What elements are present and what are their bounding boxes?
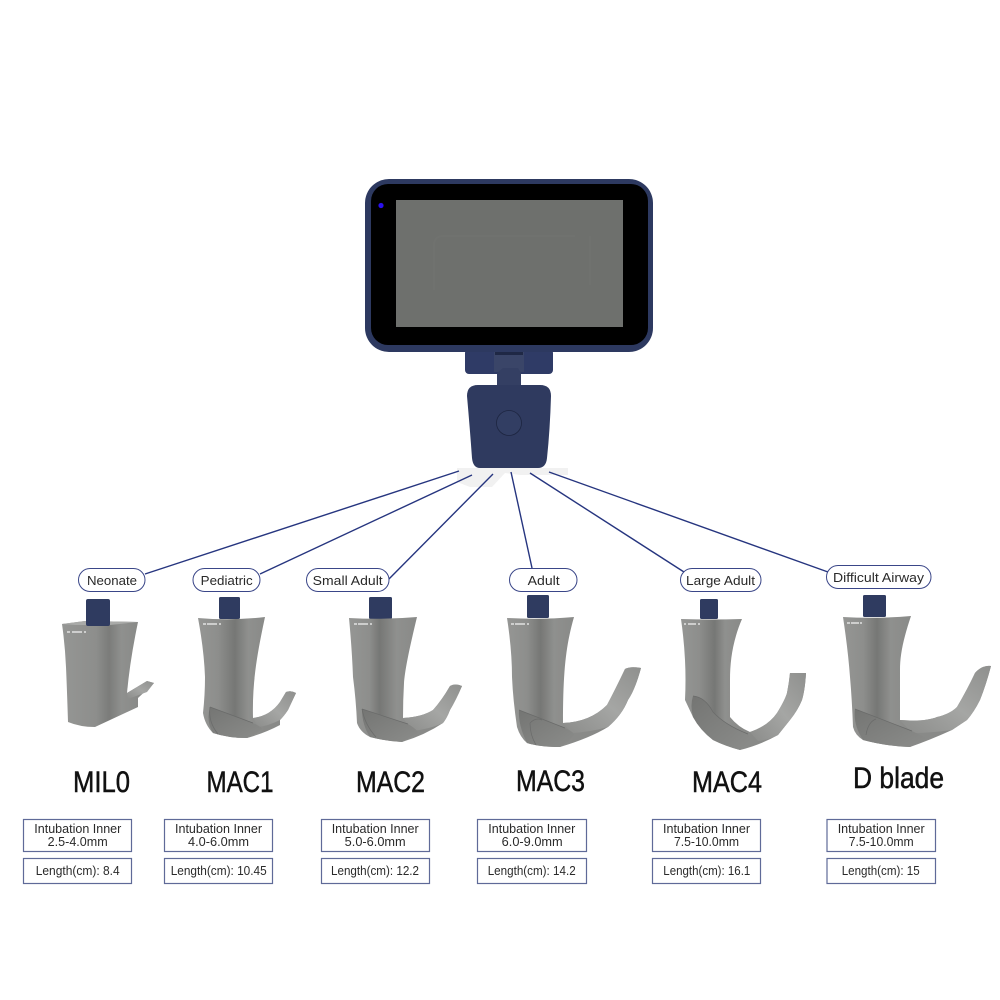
blade body (349, 617, 462, 742)
monitor bezel (371, 184, 648, 345)
intubation box: Intubation Inner (488, 822, 575, 836)
intubation box (164, 820, 272, 852)
label pill: Difficult Airway (826, 566, 931, 588)
label pill: Large Adult (680, 568, 761, 592)
blade handle connector (863, 595, 886, 617)
power LED (378, 203, 384, 208)
blade group: MIL0 neonate (62, 568, 154, 799)
name: MAC1: MAC1 (206, 766, 274, 799)
length box: Length(cm): 15 (842, 864, 920, 878)
intubation box: 4.0-6.0mm (188, 835, 249, 849)
blade handle connector (369, 597, 392, 619)
label pill: Large Adult: Large Adult (686, 574, 756, 588)
blade plate (692, 696, 752, 750)
blade logo (684, 623, 700, 625)
blade logo (511, 623, 529, 625)
hinge (465, 349, 553, 387)
label pill: Neonate (78, 568, 145, 592)
length box: Length(cm): 14.2 (488, 864, 576, 878)
blade body (198, 617, 296, 738)
blade tongue (563, 667, 641, 733)
name: MAC4: MAC4 (692, 766, 762, 799)
intubation box: Intubation Inner (663, 822, 750, 836)
intubation box: Intubation Inner (838, 822, 925, 836)
label pill: Pediatric (193, 568, 260, 592)
label pill: Adult (510, 568, 577, 592)
intubation box: 7.5-10.0mm (674, 835, 739, 849)
label pill: Difficult Airway: Difficult Airway (833, 571, 925, 585)
handle button (496, 410, 522, 436)
intubation box (652, 820, 760, 852)
intubation box: Intubation Inner (34, 822, 121, 836)
blade group: MAC3 adult (507, 568, 641, 798)
intubation box: 6.0-9.0mm (502, 835, 563, 849)
plate edge (210, 707, 253, 734)
blade group: MAC2 small adult (306, 568, 462, 799)
blade handle connector (86, 599, 110, 626)
intubation box (322, 820, 430, 852)
connector lines (145, 471, 828, 584)
blade handle connector (527, 595, 549, 618)
spec boxes: MIL0 (24, 820, 132, 884)
blade logo (203, 623, 221, 625)
length box: Length(cm): 8.4 (36, 864, 120, 878)
spec boxes: MAC1 (164, 820, 272, 884)
name: D blade: D blade (853, 762, 944, 795)
intubation box (24, 820, 132, 852)
label pill: Pediatric: Pediatric (201, 574, 253, 588)
label pill: Adult: Adult (528, 574, 560, 588)
blade logo (847, 622, 862, 624)
intubation box (827, 820, 936, 852)
intubation box: Intubation Inner (332, 822, 419, 836)
intubation box (478, 820, 586, 852)
spec boxes: MAC2 (322, 820, 430, 884)
blade logo (67, 631, 86, 633)
name: MIL0: MIL0 (73, 766, 130, 799)
blade group: D blade difficult airway (826, 566, 991, 795)
name: MAC2: MAC2 (356, 766, 425, 799)
blade top face (62, 621, 138, 625)
intubation box: 5.0-6.0mm (345, 835, 406, 849)
device: video laryngoscope monitor (365, 179, 653, 468)
blade tongue (750, 673, 806, 741)
blade handle connector (700, 599, 718, 619)
plate edge (362, 709, 408, 737)
blade tongue (253, 691, 296, 727)
label pill: Small Adult: Small Adult (313, 574, 383, 588)
intubation box: 7.5-10.0mm (849, 835, 914, 849)
intubation box: 2.5-4.0mm (48, 835, 108, 849)
blade body (507, 617, 641, 747)
blade logo (354, 623, 372, 625)
blade tip (127, 681, 154, 699)
length box: Length(cm): 12.2 (331, 864, 419, 878)
length box: Length(cm): 16.1 (663, 864, 750, 878)
blade tongue (900, 666, 991, 733)
spec boxes: D blade (827, 820, 936, 884)
blade plate (855, 709, 926, 747)
blade plate (362, 709, 418, 742)
blade plate (209, 707, 262, 738)
plate edge (855, 709, 912, 735)
blade body (62, 621, 154, 727)
spec boxes: MAC3 (478, 820, 586, 884)
connector base strip (457, 468, 568, 487)
blade body (843, 616, 991, 747)
plate edge (519, 710, 565, 745)
blade group: MAC4 large adult (680, 568, 806, 799)
blade tongue (403, 684, 462, 731)
blade plate (519, 710, 574, 747)
faint screen reflection (434, 236, 590, 290)
spec boxes: MAC4 (652, 820, 760, 884)
blade group: MAC1 pediatric (193, 568, 296, 799)
label pill: Neonate: Neonate (87, 574, 137, 588)
blade handle connector (219, 597, 240, 619)
label pill: Small Adult (306, 568, 389, 592)
length box: Length(cm): 10.45 (171, 864, 267, 878)
monitor screen (396, 200, 623, 327)
name: MAC3: MAC3 (516, 765, 585, 798)
monitor casing (365, 179, 653, 352)
blade body (681, 619, 806, 750)
handle grip (467, 385, 551, 468)
intubation box: Intubation Inner (175, 822, 262, 836)
plate edge (693, 696, 748, 734)
